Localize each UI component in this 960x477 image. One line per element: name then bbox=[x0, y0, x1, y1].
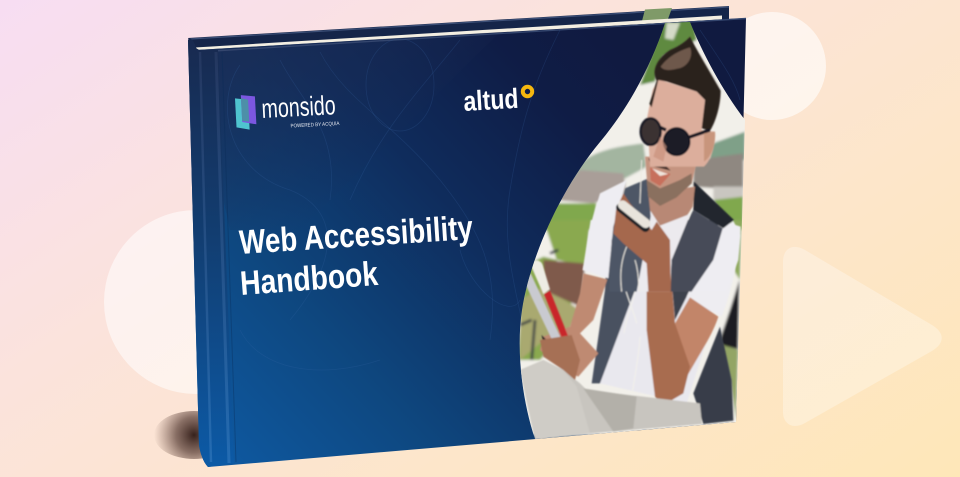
moustache bbox=[648, 158, 671, 171]
page block bbox=[195, 16, 722, 50]
neck bbox=[648, 187, 695, 226]
left sleeve bbox=[583, 220, 612, 278]
cane bbox=[526, 260, 568, 340]
book shadow bbox=[154, 411, 234, 459]
shirt bbox=[599, 292, 710, 400]
cable bbox=[640, 160, 642, 203]
lower hand bbox=[540, 335, 580, 380]
man bbox=[520, 37, 741, 440]
right upper arm bbox=[675, 297, 718, 380]
title: Web Accessibility bbox=[238, 209, 474, 262]
left arm bbox=[540, 273, 607, 377]
altud wordmark: altud bbox=[463, 83, 519, 117]
book bbox=[188, 6, 750, 467]
monsido logo bbox=[235, 90, 340, 132]
nose shadow bbox=[653, 137, 667, 162]
vest collar bbox=[693, 182, 734, 228]
front cover bbox=[188, 18, 746, 467]
phone bbox=[620, 208, 645, 228]
title: Handbook bbox=[239, 255, 379, 303]
right sleeve bbox=[687, 220, 741, 317]
decorative circle top right bbox=[718, 12, 826, 120]
yellow o bbox=[523, 87, 532, 96]
t-shirt bbox=[637, 210, 690, 292]
vest right bbox=[671, 210, 723, 292]
hand bbox=[613, 193, 671, 292]
vest left bbox=[609, 178, 651, 292]
raised forearm bbox=[646, 274, 690, 401]
monsido icon bbox=[235, 94, 257, 130]
faint cover pattern bbox=[227, 30, 740, 370]
beard bbox=[647, 173, 692, 206]
cover top edge highlight bbox=[197, 18, 746, 52]
mouth bbox=[650, 167, 671, 186]
photo scenery bbox=[510, 15, 750, 435]
face upper bbox=[647, 79, 715, 167]
decorative play triangle bbox=[783, 247, 942, 426]
powered by text: POWERED BY ACQUIA bbox=[290, 121, 340, 130]
sunglasses bbox=[641, 118, 710, 155]
title bbox=[238, 209, 474, 303]
right sleeve upper bbox=[692, 221, 741, 292]
monsido wordmark: monsido bbox=[261, 90, 336, 124]
altudo logo bbox=[463, 83, 532, 117]
ear bbox=[704, 132, 715, 162]
spine bbox=[188, 39, 236, 467]
pants knee bbox=[534, 434, 574, 439]
left sleeve upper bbox=[591, 180, 626, 274]
earphone cable bbox=[624, 290, 632, 304]
bench bbox=[543, 260, 585, 307]
hair bbox=[649, 37, 721, 131]
back cover bbox=[188, 6, 729, 52]
pants bbox=[535, 372, 703, 439]
decorative circle left bbox=[104, 210, 288, 394]
vest bbox=[592, 220, 640, 383]
lower face bbox=[644, 156, 696, 189]
photo bbox=[510, 15, 750, 440]
